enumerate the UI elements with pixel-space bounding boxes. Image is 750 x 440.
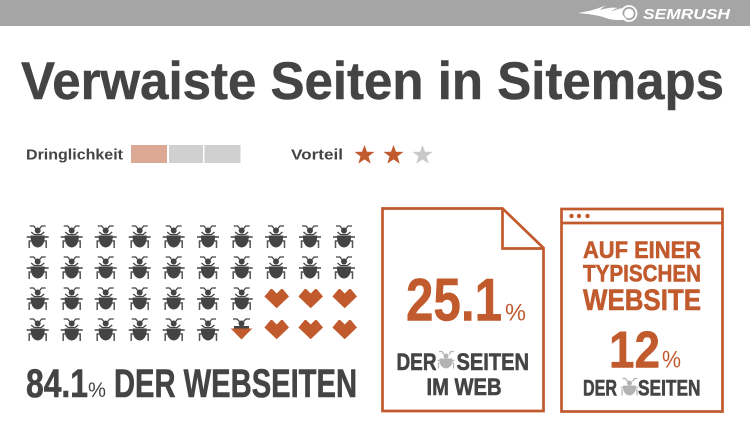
logo flame icon: [578, 5, 636, 21]
panel: browser, typical website: [562, 209, 722, 412]
panel: document, web-wide: [382, 208, 544, 411]
heading: [583, 237, 701, 317]
icon: grey bug: [621, 378, 638, 396]
value 25.1: 25.1: [406, 266, 502, 334]
benefit rating: [291, 145, 432, 164]
benefit label: Vorteil: [291, 146, 343, 164]
pictogram: bugs and hearts grid: [27, 226, 357, 341]
logo wordmark: SEMRUSH: [643, 6, 731, 23]
percent sign: %: [505, 300, 526, 326]
caption: der seiten: DER: [583, 376, 617, 400]
title: Verwaiste Seiten in Sitemaps: [21, 52, 724, 111]
heading: AUF EINER: [583, 237, 701, 264]
SEMrush logo: [578, 5, 731, 23]
value: 84.1: [26, 362, 88, 406]
urgency label: Dringlichkeit: [26, 146, 123, 164]
caption: der seiten: SEITEN: [456, 349, 529, 376]
icon: grey bug: [438, 352, 454, 368]
star ratings: [354, 145, 432, 164]
urgency rating: [26, 145, 240, 164]
browser outline: [562, 209, 722, 412]
value 12: 12: [609, 322, 660, 380]
caption: der seiten: [583, 376, 700, 400]
caption: DER WEBSEITEN: [114, 362, 357, 406]
urgency bar: [131, 145, 240, 163]
browser dots: [569, 214, 590, 218]
statistic: 84.1% of web pages: [26, 362, 357, 406]
caption: der seiten: SEITEN: [638, 376, 700, 400]
heading: TYPISCHEN: [583, 261, 701, 288]
caption: im web: IM WEB: [426, 374, 502, 401]
header bar: [0, 0, 750, 26]
caption: der seiten: DER: [396, 349, 436, 376]
document outline: [382, 208, 544, 411]
percent sign: %: [662, 346, 681, 374]
partial bug with heart tip: [231, 319, 252, 340]
percent sign: %: [88, 379, 106, 402]
caption: der seiten: [396, 349, 529, 376]
heading: WEBSITE: [583, 284, 701, 317]
